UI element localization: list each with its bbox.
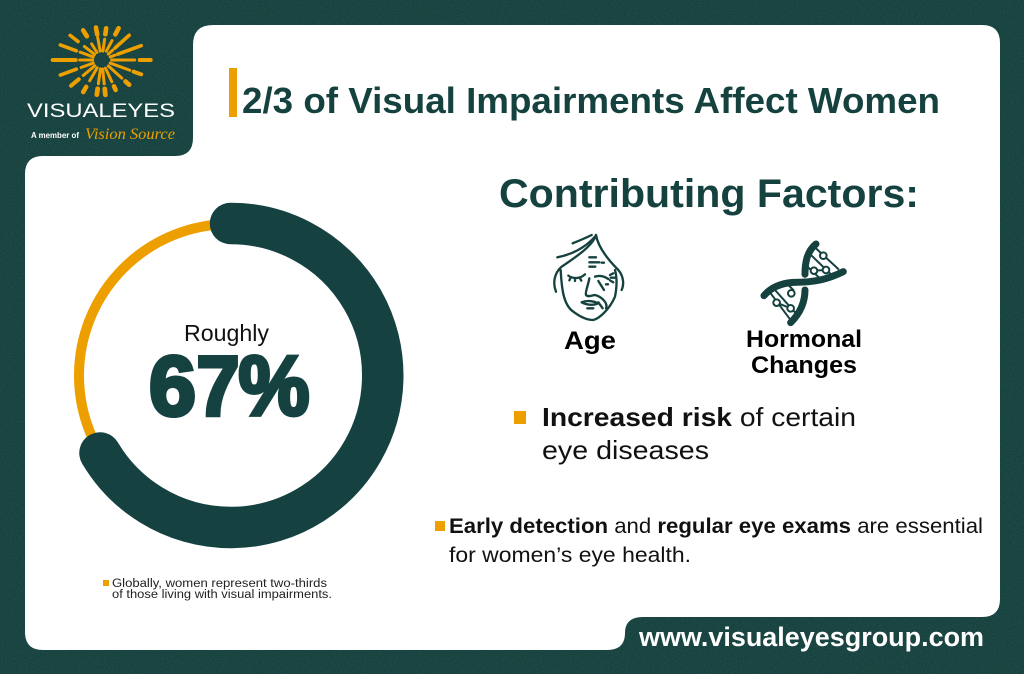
- title accent bar: [229, 68, 237, 117]
- label: Hormonal Changes: Hormonal: [746, 326, 862, 353]
- logo tagline: A member of: [31, 130, 79, 140]
- label: Hormonal Changes: Changes: [751, 352, 857, 379]
- bullet: increased risk: eye diseases: [542, 435, 709, 465]
- title: 2/3 of Visual Impairments Affect Women: [242, 80, 940, 121]
- label: Hormonal Changes: [746, 326, 862, 379]
- website url: www.visualeyesgroup.com: [638, 622, 984, 652]
- donut label: Roughly: Roughly: [184, 320, 269, 346]
- donut value: 67%: 7: [196, 339, 240, 433]
- bullet: early detection: for women’s eye health.: [449, 543, 691, 567]
- logo: Vision Source: Vision Source: [85, 126, 175, 143]
- logo: [27, 28, 175, 143]
- logo icon: sunburst: [53, 28, 151, 95]
- icon: DNA helix: [764, 244, 843, 323]
- heading: contributing factors: Contributing Factors:: [499, 172, 919, 216]
- bullet: increased risk: [514, 402, 856, 465]
- donut value: 67%: [149, 339, 310, 433]
- dark arc 67%: [100, 223, 383, 527]
- footnote: [103, 578, 332, 601]
- icon: aged face: [554, 235, 623, 320]
- donut value: 67%: 6: [149, 339, 196, 433]
- footnote: Globally, women represent two-thirds: [112, 578, 327, 590]
- donut chart: [79, 223, 383, 527]
- bullet: early detection: [435, 514, 983, 567]
- footnote: of those living with visual impairments.: [112, 589, 332, 601]
- label: Age: Age: [564, 327, 616, 355]
- bullet: increased risk: Increased risk of certain: [542, 402, 856, 432]
- orange ring: [79, 224, 382, 527]
- logo wordmark: VISUALEYES: [27, 100, 175, 122]
- bullet: early detection: Early detection and regular eye exams are essential: [449, 514, 983, 538]
- donut value: 67%: %: [238, 339, 310, 433]
